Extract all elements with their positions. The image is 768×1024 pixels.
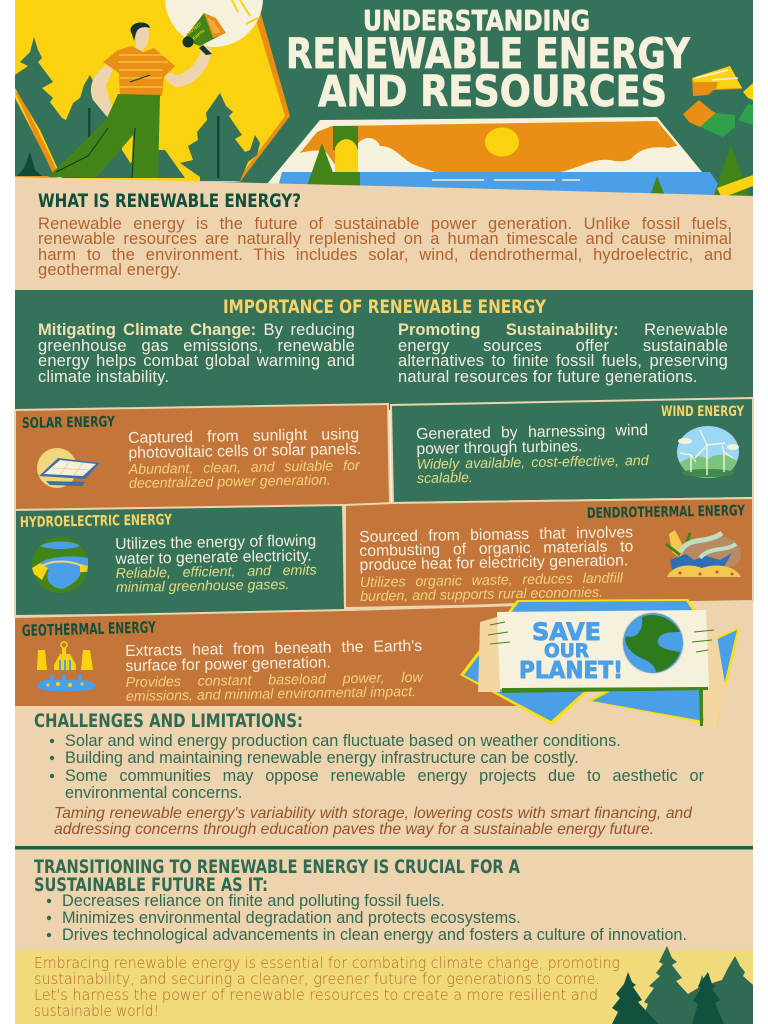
panel: hydroelectric energy: HYDROELECTRIC ENERGY xyxy=(20,512,172,531)
text: challenges list xyxy=(65,732,704,802)
panel: dendrothermal energy xyxy=(345,498,753,608)
text: hydroelectric energy: minimal greenhouse gases. xyxy=(116,577,290,596)
text: geothermal energy: Extracts heat from beneath the Earth's xyxy=(125,638,422,660)
text: dendrothermal energy: Sourced from biomass that involves xyxy=(359,524,633,546)
text: wind energy: Widely available, cost-effective, and xyxy=(417,453,649,473)
text: hydroelectric energy: Reliable, efficient, and emits xyxy=(116,562,317,582)
text: challenges list: Solar and wind energy production can fluctuate based on weather conditions. xyxy=(65,732,621,750)
text: hydroelectric energy: water to generate electricity. xyxy=(115,548,312,568)
text: mitigating climate change: Mitigating Climate Change: By reducing xyxy=(38,321,355,339)
panel: solar energy xyxy=(15,404,390,510)
text: challenges summary: addressing concerns through education paves the way for a sustainable energy future. xyxy=(54,821,654,838)
icon: megaphone: PROTECT xyxy=(185,21,203,37)
panel: wind energy: WIND ENERGY xyxy=(661,404,744,420)
text: what is renewable energy: Renewable energy is the future of sustainable power generation. Unlike fossil fuels, xyxy=(38,214,732,232)
icon: biomass pile xyxy=(666,530,741,577)
panel: header background xyxy=(15,0,753,200)
text: closing statement: Let's harness the power of renewable resources to create a more resilient and xyxy=(34,986,598,1004)
text: promoting sustainability: natural resources for future generations. xyxy=(398,368,698,386)
text: challenges list: Building and maintaining renewable energy infrastructure can be costly. xyxy=(65,749,579,767)
heading: importance: IMPORTANCE OF RENEWABLE ENERGY xyxy=(223,296,547,318)
text: closing statement: sustainable world! xyxy=(34,1002,159,1020)
illustration: landscape window with sun xyxy=(267,117,753,200)
text: mitigating climate change: greenhouse gas emissions, renewable xyxy=(38,336,355,354)
icon: megaphone xyxy=(182,13,226,55)
panel: hydroelectric energy xyxy=(15,505,345,616)
text: solar energy: photovoltaic cells or solar panels. xyxy=(128,441,361,462)
text: challenges summary xyxy=(54,805,692,838)
text: closing statement xyxy=(34,954,620,1020)
heading: transitioning: TRANSITIONING TO RENEWABLE ENERGY IS CRUCIAL FOR A xyxy=(34,856,521,878)
text: what is renewable energy: geothermal energy. xyxy=(38,261,182,279)
text: dendrothermal energy xyxy=(359,524,633,605)
text: promoting sustainability: energy sources offer sustainable xyxy=(398,336,728,354)
text: mitigating climate change: climate instability. xyxy=(38,368,169,386)
text: solar energy: Abundant, clean, and suitable for xyxy=(129,458,360,478)
title: RENEWABLE ENERGY xyxy=(286,29,690,78)
text: mitigating climate change: energy helps combat global warming and xyxy=(38,352,355,370)
panel: geothermal energy xyxy=(15,604,520,706)
text: challenges summary: Taming renewable energy's variability with storage, lowering costs with smart financing, and xyxy=(54,805,692,822)
icon: hydroelectric dam xyxy=(32,537,88,593)
bullets: challenges markers xyxy=(50,739,54,778)
text: promoting sustainability xyxy=(398,321,728,386)
text: closing statement: Embracing renewable energy is essential for combating climate change, promoting xyxy=(34,954,620,972)
heading: what is renewable energy: WHAT IS RENEWABLE ENERGY? xyxy=(38,190,301,212)
panel: wind energy xyxy=(391,398,753,503)
text: what is renewable energy xyxy=(38,214,732,279)
text: geothermal energy: surface for power generation. xyxy=(125,654,331,675)
icon: wind turbines xyxy=(677,426,739,478)
text: dendrothermal energy: Utilizes organic waste, reduces landfill xyxy=(360,570,623,591)
panel: what is renewable energy background xyxy=(15,177,753,290)
text: promoting sustainability: alternatives to finite fossil fuels, preserving xyxy=(398,352,728,370)
icon: floating recycled landscape shards xyxy=(683,66,753,137)
title xyxy=(286,4,690,117)
panel: solar energy: SOLAR ENERGY xyxy=(22,414,116,432)
text: closing statement: sustainability, and securing a cleaner, greener future for generations to come. xyxy=(34,970,600,988)
text: challenges list: Some communities may oppose renewable energy projects due to aesthetic or xyxy=(65,767,704,785)
icon: globe xyxy=(622,612,684,674)
text: geothermal energy xyxy=(125,638,424,705)
text: transition list: Drives technological advancements in clean energy and fosters a culture of innovation. xyxy=(62,926,687,944)
text: dendrothermal energy: produce heat for electricity generation. xyxy=(359,553,628,574)
panel: closing statement background xyxy=(15,950,753,1024)
illustration: save our planet banner: OUR xyxy=(544,640,589,662)
heading: transitioning: SUSTAINABLE FUTURE AS IT: xyxy=(34,874,268,896)
illustration: footer pine trees xyxy=(612,946,753,1024)
text: dendrothermal energy: burden, and supports rural economies. xyxy=(360,584,603,605)
bullets: transition markers xyxy=(47,899,51,937)
text: what is renewable energy: harm to the environment. This includes solar, wind, dendrothermal, hydroelectric, and xyxy=(38,246,732,264)
text: wind energy xyxy=(416,422,649,487)
text: hydroelectric energy: Utilizes the energy of flowing xyxy=(115,532,316,553)
title: AND RESOURCES xyxy=(318,67,667,117)
icon: megaphone: EARTH xyxy=(192,28,206,41)
text: wind energy: scalable. xyxy=(417,470,473,487)
text: geothermal energy: emissions, and minimal environmental impact. xyxy=(126,684,416,705)
panel: lower sections background xyxy=(15,600,753,950)
text: transition list: Minimizes environmental degradation and protects ecosystems. xyxy=(62,909,521,927)
illustration: forest and person with megaphone xyxy=(15,0,290,182)
icon: solar panel xyxy=(37,448,100,488)
illustration: save our planet banner: PLANET! xyxy=(519,658,623,684)
text: solar energy xyxy=(128,426,361,492)
panel: importance background xyxy=(15,290,753,410)
illustration: save our planet banner: SAVE xyxy=(532,618,601,646)
text: transition list xyxy=(62,892,687,944)
title: UNDERSTANDING xyxy=(363,4,590,37)
icon: geothermal plant xyxy=(37,642,96,691)
text: challenges list: environmental concerns. xyxy=(65,784,242,802)
illustration: save our planet banner xyxy=(460,599,740,726)
text: dendrothermal energy: combusting of organic materials to xyxy=(359,538,633,560)
heading: challenges and limitations: CHALLENGES AND LIMITATIONS: xyxy=(34,710,303,732)
text: mitigating climate change xyxy=(38,321,355,386)
text: solar energy: decentralized power generation. xyxy=(129,472,331,492)
text: hydroelectric energy xyxy=(115,532,317,596)
text: what is renewable energy: renewable resources are naturally replenished on a human timescale and cause minimal xyxy=(38,230,732,248)
text: geothermal energy: Provides constant baseload power, low xyxy=(126,670,423,691)
text: promoting sustainability: Promoting Sustainability: Renewable xyxy=(398,321,728,339)
person xyxy=(48,22,212,178)
text: transition list: Decreases reliance on finite and polluting fossil fuels. xyxy=(62,892,445,910)
heading: transitioning xyxy=(34,856,521,896)
text: wind energy: power through turbines. xyxy=(416,438,582,458)
text: wind energy: Generated by harnessing wind xyxy=(416,422,648,443)
text: solar energy: Captured from sunlight using xyxy=(128,426,359,447)
panel: geothermal energy: GEOTHERMAL ENERGY xyxy=(22,618,157,640)
